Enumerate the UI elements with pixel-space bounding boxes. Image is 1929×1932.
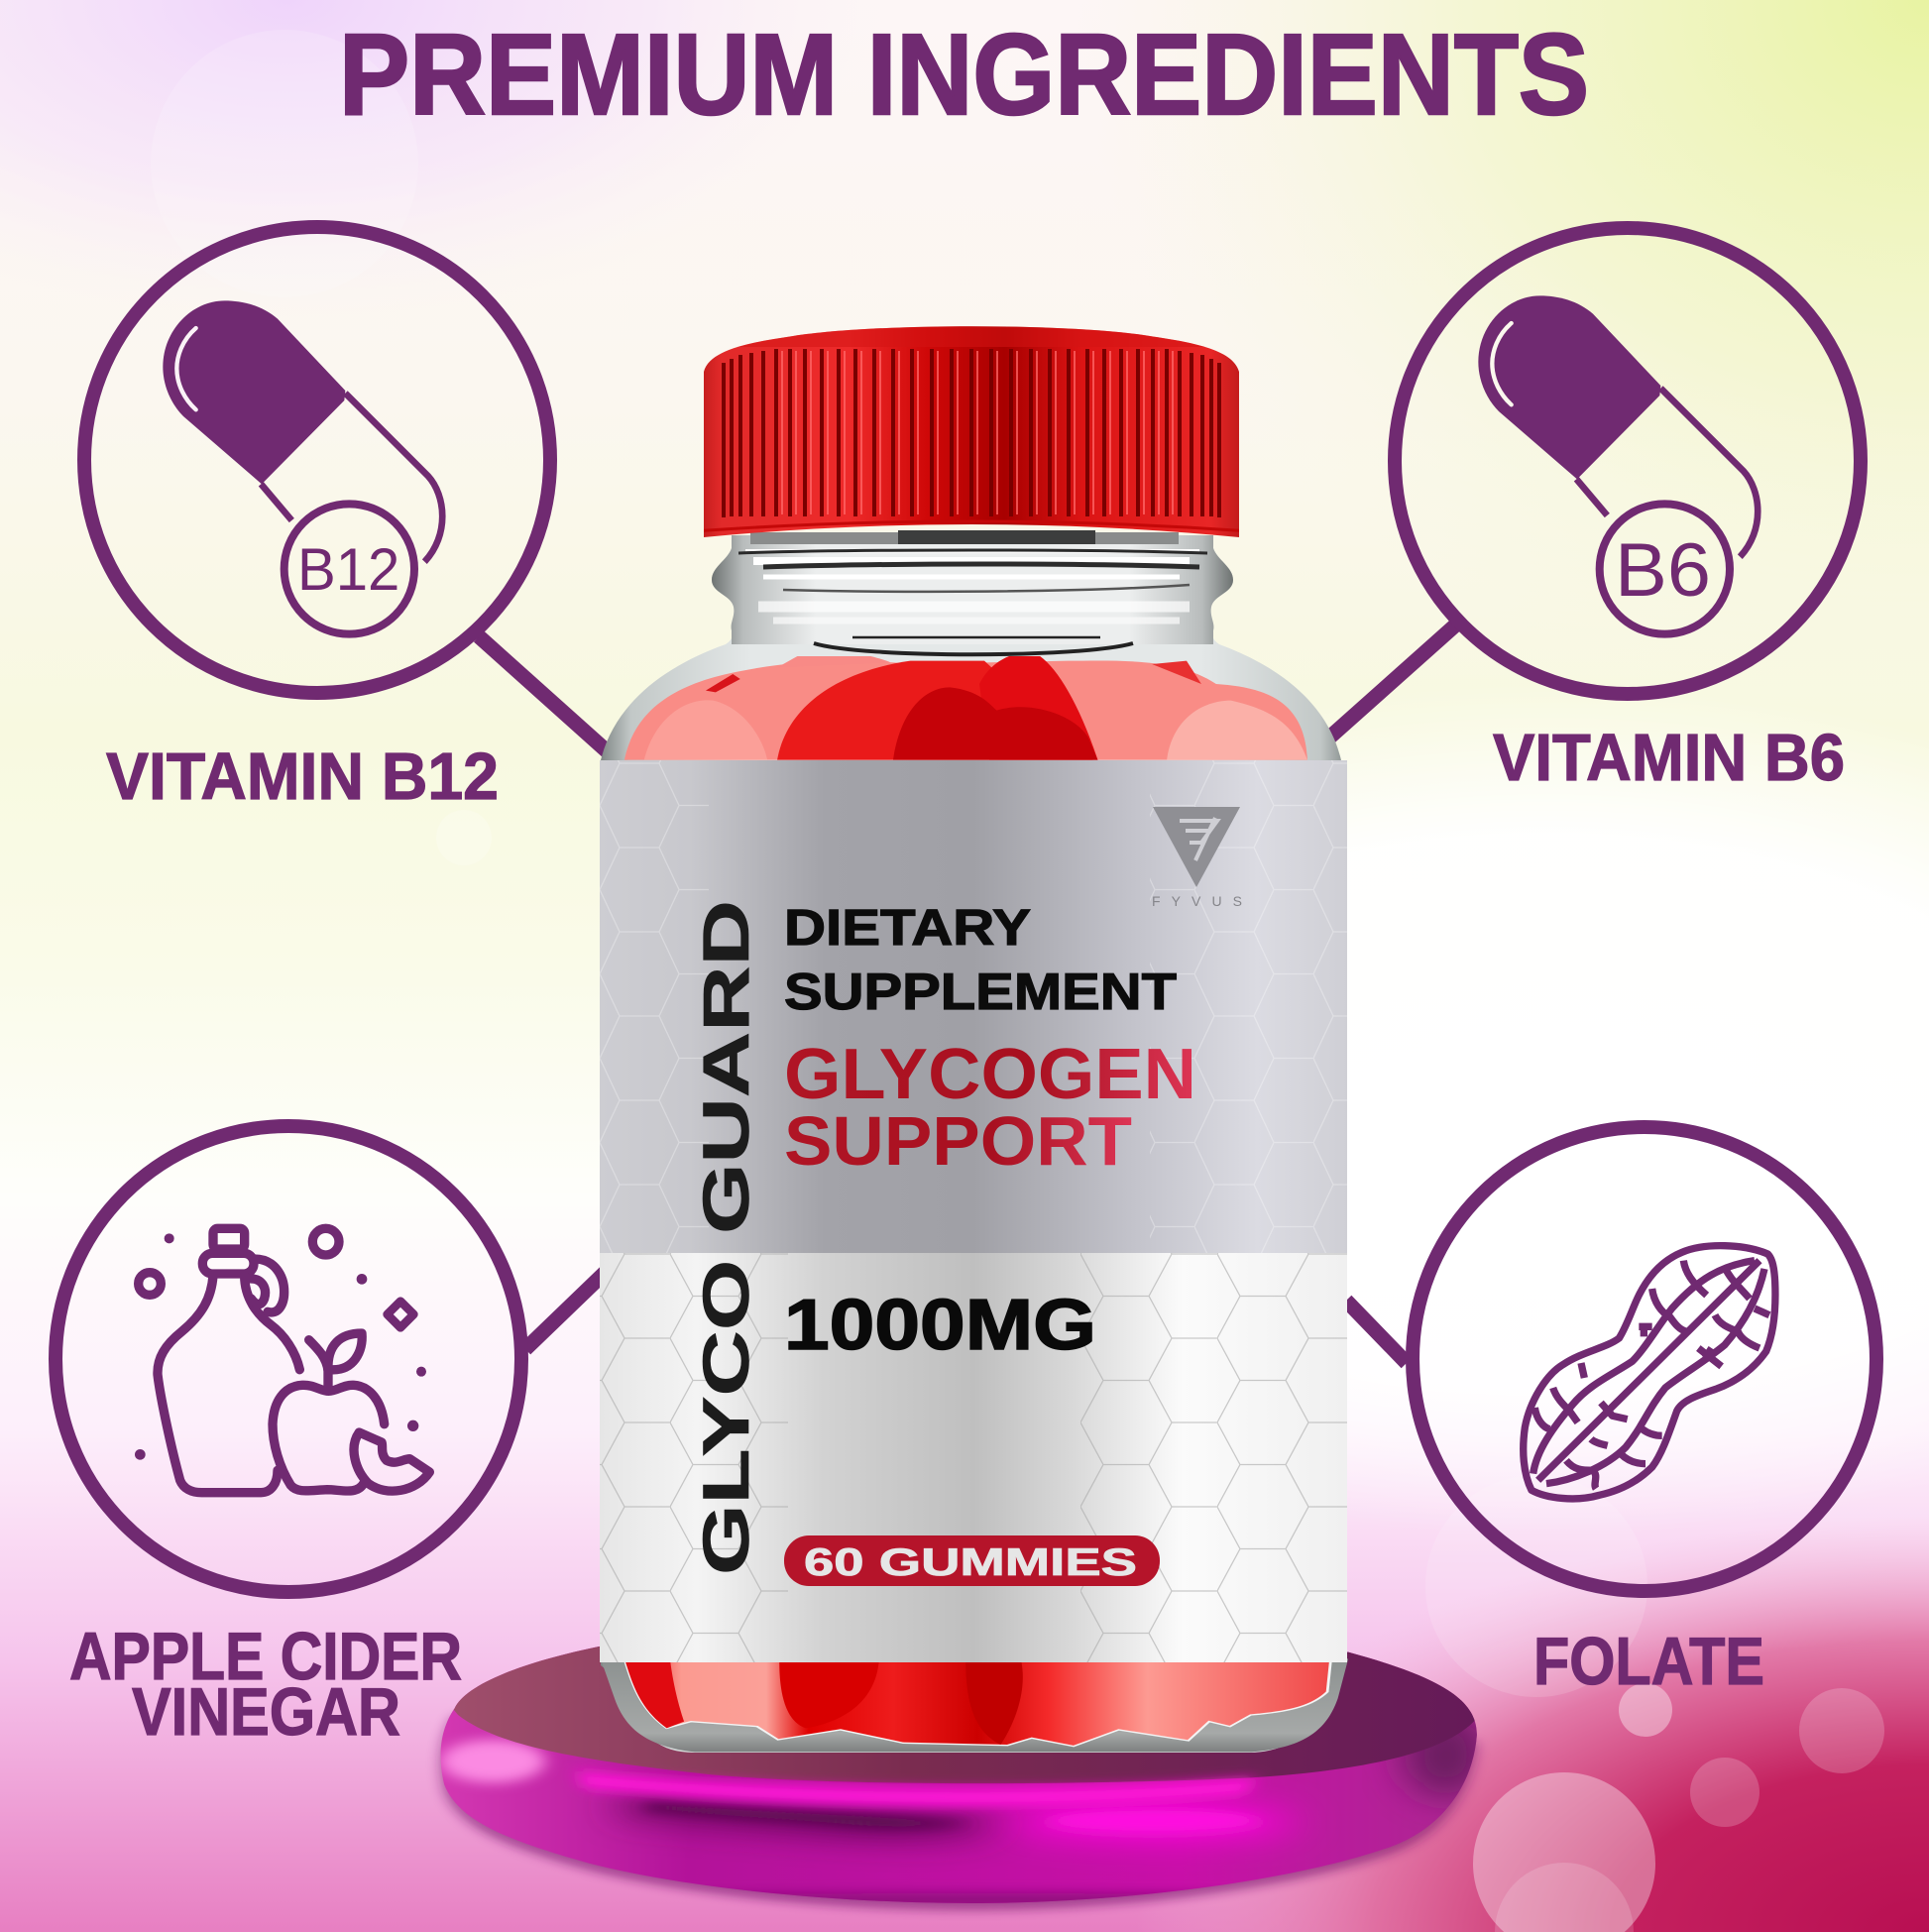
dietary supplement: DIETARY [784,899,1031,956]
icon: peanut [1524,1246,1775,1499]
panel: folate [1413,1127,1876,1699]
label: vitamin B6: VITAMIN B6 [1493,721,1845,795]
glycogen support: GLYCOGEN [784,1035,1196,1114]
label: apple cider vinegar: VINEGAR [132,1674,400,1750]
pedestal [416,1636,1507,1913]
icon: B6 capsule [1478,295,1758,634]
label: folate: FOLATE [1533,1624,1764,1699]
label: apple cider vinegar [69,1619,462,1750]
dosage: 1000MG [784,1286,1096,1365]
panel: apple cider vinegar [56,1126,521,1750]
ring: vitamin B12 [84,227,550,693]
connector lines [479,625,1456,1363]
gummies lower [624,1658,1331,1747]
icon: B6 capsule: B6 [1615,528,1711,613]
gummies upper [624,650,1307,760]
ring: apple cider vinegar [56,1126,521,1592]
label [600,760,1347,1662]
bottle neck [712,530,1233,654]
cap [704,326,1239,537]
logo: FYVUS: FYVUS [1152,893,1242,909]
dietary supplement [784,899,1177,1021]
gummies count badge [784,1535,1160,1586]
panel: vitamin B12 [84,227,550,814]
brand name: GLYCO GUARD [689,900,762,1575]
label: vitamin B12: VITAMIN B12 [106,739,499,814]
ring: vitamin B6 [1395,228,1861,694]
logo: FYVUS [1152,807,1242,909]
glass base [601,1658,1348,1752]
icon: B12 capsule: B12 [297,536,399,603]
label: apple cider vinegar: APPLE CIDER [69,1619,462,1694]
title: PREMIUM INGREDIENTS [339,10,1589,139]
gummies count badge: 60 GUMMIES [804,1541,1137,1584]
glycogen support: SUPPORT [784,1102,1132,1180]
bottle glass [601,535,1341,1753]
icon: bottle and apple [135,1228,429,1493]
ring: folate [1413,1127,1876,1591]
dietary supplement: SUPPLEMENT [784,964,1177,1021]
panel: vitamin B6 [1395,228,1861,795]
product bottle [600,317,1348,1753]
icon: B12 capsule [163,300,442,634]
glycogen support [784,1035,1196,1180]
